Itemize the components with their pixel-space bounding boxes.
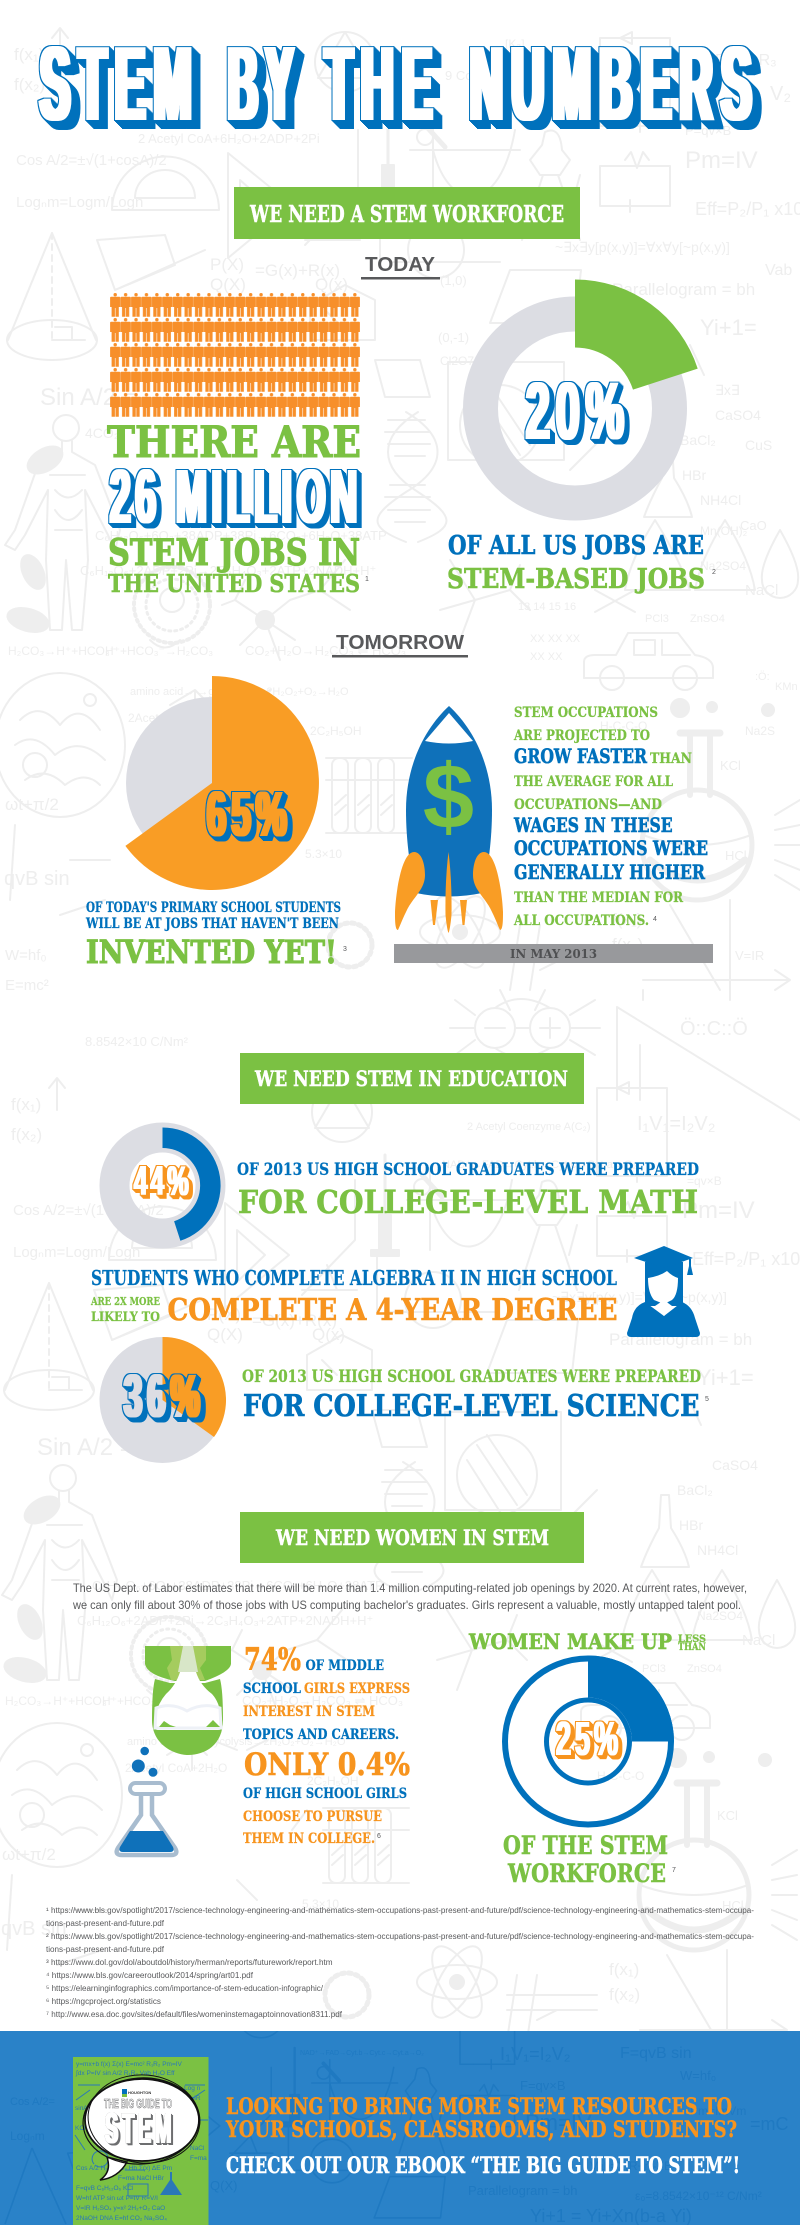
cover doodles: E=IR [186, 2095, 201, 2102]
caption bar: in May 2013 [394, 944, 713, 963]
background doodles: math and science sketches: Yi+1= [700, 315, 757, 340]
background doodles repeated lower on the page: CaSO4 [712, 1457, 758, 1473]
donut chart: 20 percent [480, 280, 698, 503]
background doodles: math and science sketches: CaO [740, 518, 767, 533]
background doodles: math and science sketches: [K₃] [505, 37, 525, 51]
text block: college-level math: FOR COLLEGE-LEVEL MATH [238, 1184, 698, 1221]
background doodles repeated lower on the page: f(x₂) [11, 1125, 42, 1144]
speech bubble with book title: THE BIG GUIDE TO [104, 2096, 172, 2111]
background doodles: math and science sketches: KCl [720, 758, 741, 773]
text block: of all US jobs are STEM-based: STEM-BASED JOBS [447, 563, 705, 595]
cover doodles: ∫dx P=IV sin A/2 R₁R₂ Vab H₂O Eff [75, 2070, 175, 2077]
text block: 74 percent and 0.4 percent of girls: INTEREST IN STEM [243, 1704, 375, 1720]
pie chart: 65 percent: 65% [207, 778, 292, 850]
background doodles repeated lower on the page: f(x₁) [11, 1095, 41, 1114]
heading: tomorrow: TOMORROW [336, 632, 464, 654]
background doodles: math and science sketches: 8.8542×10 C/Nm² [85, 1034, 189, 1049]
text block: STEM occupations grow faster: THAN [650, 751, 692, 767]
speech bubble with book title [80, 2070, 204, 2180]
icon: graduate in cap and gown [627, 1246, 700, 1337]
background doodles: math and science sketches: :Ö: [755, 671, 770, 683]
section banner: we need STEM in education: WE NEED STEM IN EDUCATION [254, 1066, 568, 1091]
footer doodles: Parallelogram = bh [468, 2183, 577, 2198]
text block: STEM occupations grow faster: THAN THE MEDIAN FOR [514, 890, 684, 906]
background doodles: math and science sketches: Mn(OH)₂ [700, 524, 748, 538]
background doodles repeated lower on the page: Yi+1= [697, 1365, 754, 1390]
background doodles: math and science sketches: XX XX XX [530, 633, 581, 645]
footer doodles: NAD⁺→FAD→Cyt.b→Cyt.c→Cyt.a→O₂ [300, 2050, 424, 2057]
background doodles: math and science sketches: Sin A/2 = [40, 384, 137, 411]
background doodles repeated lower on the page: Sin A/2 = [37, 1434, 134, 1461]
background doodles repeated lower on the page: NaCl [742, 1632, 775, 1649]
background doodles: math and science sketches: CuS [745, 437, 772, 453]
text block: STEM occupations grow faster: WAGES IN THESE [513, 814, 673, 837]
background doodles: math and science sketches: Cos A/2=±√(1+cosA)/2 [16, 152, 167, 169]
background doodles repeated lower on the page: 2Acetyl CoA+2H₂O [125, 1761, 227, 1775]
cover doodles [75, 2061, 208, 2222]
footer doodles: F=qv×B [520, 2078, 566, 2093]
footnotes: source URLs: ⁶ https://ngcproject.org/statistics [46, 1997, 161, 2006]
text block: STEM occupations grow faster: ALL OCCUPATIONS. [513, 913, 649, 929]
text block: college-level science: OF 2013 US HIGH SCHOOL GRADUATES WERE PREPARED [242, 1367, 701, 1386]
background doodles: math and science sketches: 9 Coenzyme A(C₂) [445, 68, 553, 83]
background doodles repeated lower on the page: 2C₂H₅OH [307, 1774, 358, 1788]
background doodles: math and science sketches: W=hf₀ [5, 947, 47, 964]
text block: algebra II and 4-year degree [90, 1266, 617, 1328]
background doodles repeated lower on the page: ~∃x∃y[p(x,y)]=∀x∀y[~p(x,y)] [552, 1289, 727, 1305]
background doodles: math and science sketches: qvB sin [4, 868, 70, 890]
heading: women make up less than: LESS [678, 1634, 706, 1645]
footer doodles: Logₙm [10, 2129, 45, 2143]
text block: STEM occupations grow faster: ARE PROJECTED TO [513, 728, 650, 744]
footer doodles: Pm=ImVm [690, 2104, 746, 2118]
title: BY [228, 25, 301, 143]
background doodles: math and science sketches: KMn [775, 681, 798, 693]
text block: algebra II and 4-year degree: LIKELY TO [91, 1310, 160, 1325]
cover doodles: V=IR H₂SO₄ y=x² 2H₂+O₂ CaO [76, 2205, 165, 2212]
footer panel: ebook call to action [0, 2031, 800, 2225]
background doodles repeated lower on the page: P(X) [207, 1305, 241, 1324]
footer doodles: Pm=IV [525, 2110, 592, 2135]
background doodles repeated lower on the page: 2 Acetyl Coenzyme A(C₂) [467, 1121, 590, 1133]
background doodles repeated lower on the page [0, 1069, 800, 2170]
background doodles: math and science sketches: P=qv×B [685, 123, 731, 138]
background doodles: math and science sketches: H⁺+HCO₃⁻→H₂CO₃ [105, 644, 213, 658]
background doodles repeated lower on the page: NAD⁺→FAD→Cyt.b→Cyt.c→Cyt.a→O₂ [442, 1159, 637, 1171]
ebook cover [73, 2057, 208, 2225]
text block: STEM occupations grow faster: GROW FASTER [514, 745, 648, 768]
cover doodles: NaCl [190, 2145, 205, 2152]
background doodles: math and science sketches: 13 14 15 16 [518, 601, 576, 613]
text block: 74 percent and 0.4 percent of girls: OF MIDDLE [306, 1658, 384, 1674]
text block: algebra II and 4-year degree: COMPLETE A 4-YEAR DEGREE [168, 1293, 618, 1328]
text block: STEM occupations grow faster: GENERALLY HIGHER [514, 861, 706, 884]
background doodles: math and science sketches: Logₙm=Logm/Logn [16, 194, 143, 211]
background doodles: math and science sketches: V₂ [770, 83, 791, 105]
caption bar: in May 2013: IN MAY 2013 [510, 947, 597, 961]
background doodles: math and science sketches: Q(x) [315, 275, 348, 294]
background doodles: math and science sketches: 2 Acetyl CoA+6H₂O+2ADP+2Pi [138, 131, 320, 146]
text block: 74 percent and 0.4 percent of girls [243, 1642, 410, 1847]
background doodles: math and science sketches: PCl3 [645, 613, 669, 625]
footer doodles: W=hf₀ [680, 2068, 716, 2083]
text block: STEM occupations grow faster: OCCUPATIONS WERE [514, 837, 708, 860]
paragraph: computing job openings: we can only fill about 30% of those jobs with US computing bachelor's graduates. Girls represent a valuable, mostly untapped talent pool. [72, 1598, 741, 1612]
pie chart: 36 percent [100, 1337, 226, 1463]
background doodles: math and science sketches: HBr [682, 467, 706, 483]
text block: of the STEM workforce: WORKFORCE [507, 1859, 666, 1888]
footnotes: source URLs: tions-past-present-and-future.pdf [46, 1919, 165, 1928]
speech bubble with book title: STEM [105, 2104, 175, 2153]
icon: rocket with dollar sign [395, 706, 503, 933]
text block: algebra II and 4-year degree: STUDENTS WHO COMPLETE ALGEBRA II IN HIGH SCHOOL [91, 1266, 617, 1290]
footer doodles: ε₀=8.8542×10⁻¹² C/Nm² [635, 2189, 762, 2203]
cover doodles: F=qvB C₆H₁₂O₆ KCl [76, 2185, 134, 2192]
footer doodles: Vab=Σ(R+r)-ΣE [590, 2159, 672, 2173]
background doodles: math and science sketches: (0,-1) [438, 330, 469, 345]
background doodles: math and science sketches: ZnSO4 [690, 613, 725, 625]
icon: rocket with dollar sign: $ [423, 746, 474, 848]
heading: women make up less than: WOMEN MAKE UP [468, 1629, 672, 1654]
footer doodles [4, 2031, 788, 2225]
background doodles: math and science sketches: E=mc² [5, 977, 49, 994]
footnotes: source URLs: ¹ https://www.bls.gov/spotlight/2017/science-technology-engineering-and-mathematics-stem-occupations-past-present-and-future/pdf/science-technology-engineering-and-mathematics-stem-occupa- [46, 1906, 754, 1915]
call to action text [225, 2094, 740, 2179]
background doodles: math and science sketches: Q(X) [210, 275, 246, 294]
background doodles: math and science sketches: V=IR [735, 948, 764, 963]
background doodles: math and science sketches: Na2SO4 [700, 559, 746, 573]
background doodles repeated lower on the page: HCl [722, 1898, 744, 1913]
cover doodles: y=mx+b f(x) Σ(x) E=mc² R₁R₂ Pm=IV [76, 2061, 183, 2068]
background doodles repeated lower on the page: NH4Cl [697, 1542, 738, 1558]
text block: STEM occupations grow faster: THE AVERAGE FOR ALL [514, 774, 673, 790]
text block: 74 percent and 0.4 percent of girls: CHOOSE TO PURSUE [243, 1809, 382, 1825]
background doodles: math and science sketches: Na2S [745, 724, 775, 738]
text block: there are 26 million STEM jobs: 1 [365, 576, 369, 583]
cover doodles: F=ma NaCl HBr [118, 2175, 165, 2182]
background doodles repeated lower on the page: =qv×B [687, 1174, 722, 1188]
cover doodles: KCl [75, 2125, 86, 2132]
cover doodles: W=hf ATP sin ωt P=IV R=V/I [76, 2195, 158, 2202]
background doodles repeated lower on the page: C₆H₁₂O₆+2ADP+2Pi→2C₃H₄O₃+2ATP+2NADH+H⁺ [77, 1613, 373, 1628]
ring chart: 25 percent: 25% [556, 1713, 622, 1766]
text block: 74 percent and 0.4 percent of girls: SCHOOL [243, 1681, 301, 1697]
footnotes: source URLs: ⁷ http://www.esa.doc.gov/sites/default/files/womeninstemagaptoinnovation8311.pdf [46, 2010, 343, 2019]
text block: of all US jobs are STEM-based: 2 [712, 569, 716, 576]
background doodles repeated lower on the page: H₂CO₃→H⁺+HCO₃⁻ [5, 1694, 113, 1708]
background doodles repeated lower on the page: =G(x)+R(x) [252, 1311, 337, 1330]
section banner: we need a STEM workforce [234, 187, 580, 239]
text block: 74 percent and 0.4 percent of girls: 6 [377, 1833, 381, 1840]
footer doodles: Q(X) [210, 2178, 237, 2193]
text block: college-level math [237, 1160, 699, 1221]
background doodles: math and science sketches: CO₂+H₂O→H₂CO₃ ⇌ HCO₃ [245, 643, 406, 658]
background doodles: math and science sketches: Σ(xᵢ-x̄) [235, 49, 277, 66]
text block: college-level science: 5 [705, 1396, 709, 1403]
text block: 74 percent and 0.4 percent of girls: THEM IN COLLEGE. [243, 1831, 375, 1847]
text block: jobs not invented yet: INVENTED YET! [86, 934, 337, 971]
section banner: we need women in STEM: WE NEED WOMEN IN STEM [275, 1525, 549, 1550]
background doodles: math and science sketches: H-C-C-O [600, 719, 647, 733]
background doodles repeated lower on the page: C₆H₁₂O₆+6O₂+38ADP+38Pi→6CO₂+6H₂O+38ATP [92, 1578, 384, 1593]
background doodles repeated lower on the page: PCl3 [642, 1663, 666, 1675]
text block: college-level math: OF 2013 US HIGH SCHOOL GRADUATES WERE PREPARED [237, 1160, 699, 1179]
text block: STEM occupations grow faster: OCCUPATIONS—AND [514, 797, 662, 813]
background doodles: math and science sketches [0, 28, 800, 1120]
background doodles: math and science sketches: Ö::C::Ö [680, 1018, 748, 1040]
footer doodles: I₁V₁=I₂V₂ [500, 2044, 571, 2064]
background doodles repeated lower on the page: Pm=IV [682, 1197, 755, 1224]
pie chart: 65 percent [125, 676, 319, 890]
background doodles: math and science sketches: CaSO4 [715, 407, 761, 423]
background doodles: math and science sketches: NaCl [745, 582, 778, 599]
background doodles: math and science sketches: amino acid→ →glycolysis→2H₂O₂+O₂→H₂O [130, 686, 349, 698]
text block: 74 percent and 0.4 percent of girls: GIRLS EXPRESS [304, 1681, 410, 1697]
background doodles repeated lower on the page: Q(X) [207, 1325, 243, 1344]
background doodles: math and science sketches: f(x₂) [14, 75, 45, 94]
background doodles repeated lower on the page: ZnSO4 [687, 1663, 722, 1675]
text block: of all US jobs are STEM-based [447, 531, 716, 595]
footnotes: source URLs: ² https://www.bls.gov/spotlight/2017/science-technology-engineering-and-mathematics-stem-occupations-past-present-and-future/pdf/science-technology-engineering-and-mathematics-stem-occupa- [46, 1932, 754, 1941]
text block: 74 percent and 0.4 percent of girls: TOPICS AND CAREERS. [243, 1727, 399, 1743]
background doodles: math and science sketches: f(x₁) [612, 910, 642, 929]
background doodles: math and science sketches: (1,0) [440, 273, 467, 288]
footnotes: source URLs: ⁴ https://www.bls.gov/careeroutlook/2014/spring/art01.pdf [46, 1971, 254, 1980]
background doodles: math and science sketches: f(x₂) [612, 935, 643, 954]
footer doodles: Cos A/2= [10, 2096, 55, 2108]
background doodles: math and science sketches: Cl2O7 [440, 354, 474, 368]
text block: jobs not invented yet [85, 900, 347, 971]
background doodles repeated lower on the page: CO₂+H₂O→H₂CO₃ ⇌ HCO₃ [242, 1693, 403, 1708]
background doodles: math and science sketches: Parallelogram = bh [612, 280, 755, 299]
cover doodles: sinA [75, 2105, 88, 2112]
text block: there are 26 million STEM jobs: THERE ARE [107, 418, 361, 468]
text block: 74 percent and 0.4 percent of girls: 74% [244, 1642, 301, 1678]
text block: STEM occupations grow faster: 4 [653, 916, 657, 923]
footnotes: source URLs: ³ https://www.dol.gov/dol/aboutdol/history/herman/reports/futurework/report.htm [46, 1958, 333, 1967]
cover doodles: Log n [184, 2085, 201, 2092]
heading: women make up less than: THAN [678, 1642, 706, 1653]
text block: of the STEM workforce: OF THE STEM [503, 1831, 668, 1860]
title [40, 25, 760, 143]
background doodles repeated lower on the page: H-C-C-O [597, 1769, 644, 1783]
text block: jobs not invented yet: OF TODAY'S PRIMARY SCHOOL STUDENTS [86, 900, 341, 916]
background doodles repeated lower on the page: f(x₂) [609, 1985, 640, 2004]
background doodles repeated lower on the page: f(x₁) [609, 1960, 639, 1979]
background doodles: math and science sketches: ~∃x∃y[p(x,y)]=∀x∀y[~p(x,y)] [555, 239, 730, 255]
background doodles repeated lower on the page: I₁V₁=I₂V₂ [637, 1113, 716, 1135]
footnotes: source URLs: ⁵ https://elearninginfographics.com/importance-of-stem-education-infographic/ [46, 1984, 324, 1993]
background doodles: math and science sketches: BaCl₂ [680, 432, 716, 448]
footer doodles: =mC [750, 2114, 789, 2134]
text block: of all US jobs are STEM-based: OF ALL US JOBS ARE [448, 531, 704, 561]
background doodles: math and science sketches: =G(x)+R(x) [255, 261, 340, 280]
text block: STEM occupations grow faster [513, 705, 708, 929]
background doodles: math and science sketches: R₁ R₂ R₃ [715, 52, 777, 69]
text block: there are 26 million STEM jobs: THE UNITED STATES [108, 569, 360, 598]
cover doodles: Cos A/2 H₂O CO₂ Hb Σ(x) ΔE Pm [76, 2165, 172, 2172]
background doodles: math and science sketches: ∃x∃ [715, 382, 740, 398]
background doodles repeated lower on the page: Na2SO4 [697, 1609, 743, 1623]
background doodles: math and science sketches: C₆H₁₂O₆+6O₂+38ADP+38Pi→6CO₂+6H₂O+38ATP [95, 528, 387, 543]
background doodles: math and science sketches: HCl [725, 848, 747, 863]
background doodles: math and science sketches: H₂CO₃→H⁺+HCO₃⁻ [8, 644, 116, 658]
background doodles: math and science sketches: f(x₁) [14, 45, 44, 64]
text block: of the STEM workforce [503, 1831, 676, 1888]
background doodles: math and science sketches: Vab [765, 262, 792, 279]
background doodles repeated lower on the page: Q(x) [312, 1325, 345, 1344]
background doodles: math and science sketches: C₆H₁₂O₆+2ADP+2Pi→2C₃H₄O₃+2ATP+2NADH+H⁺ [80, 563, 376, 578]
background doodles repeated lower on the page: Parallelogram = bh [609, 1330, 752, 1349]
background doodles repeated lower on the page: 5.3×10 [302, 1897, 339, 1911]
donut chart: 44 percent [114, 1128, 221, 1241]
heading: today: TODAY [365, 254, 436, 276]
background doodles repeated lower on the page: H⁺+HCO₃⁻→H₂CO₃ [102, 1694, 210, 1708]
paragraph: computing job openings [72, 1581, 747, 1612]
background doodles: math and science sketches: NH4Cl [700, 492, 741, 508]
text block: jobs not invented yet: 3 [343, 946, 347, 953]
background doodles repeated lower on the page: HBr [679, 1517, 703, 1533]
background doodles: math and science sketches: XX XX [530, 651, 563, 663]
background doodles repeated lower on the page: C NaZCO5 [367, 1069, 436, 1085]
background doodles repeated lower on the page: Logₙm=Logm/Logn [13, 1244, 140, 1261]
cover doodles: F=ma [190, 2155, 207, 2162]
text block: college-level science [242, 1367, 709, 1424]
text block: STEM occupations grow faster: STEM OCCUPATIONS [514, 705, 658, 721]
text: 26 MILLION [110, 454, 362, 540]
section banner: we need women in STEM [240, 1512, 584, 1563]
section banner: we need a STEM workforce: WE NEED A STEM WORKFORCE [249, 201, 564, 228]
pie chart: 36 percent: 36% [124, 1362, 205, 1430]
text block: jobs not invented yet: WILL BE AT JOBS THAT HAVEN'T BEEN [85, 916, 339, 932]
text block: 74 percent and 0.4 percent of girls: OF HIGH SCHOOL GIRLS [243, 1786, 407, 1802]
background doodles: math and science sketches: 2C₂H₅OH [310, 724, 362, 738]
background doodles repeated lower on the page: BaCl₂ [677, 1482, 713, 1498]
footer doodles: F=qvB sin [620, 2045, 692, 2062]
background doodles: math and science sketches: Pm=IV [685, 147, 758, 174]
icon: flask with bubbles [117, 1747, 176, 1855]
text block: there are 26 million STEM jobs [107, 418, 369, 598]
donut chart: 44 percent: 44% [134, 1157, 192, 1204]
footnotes: source URLs [46, 1906, 754, 2019]
background doodles: math and science sketches: ωt+π/2 [5, 795, 59, 814]
background doodles repeated lower on the page: amino acid→ →glycolysis→2H₂O₂+O₂→H₂O [127, 1736, 346, 1748]
paragraph: computing job openings: The US Dept. of Labor estimates that there will be more than 1.4 million computing-related job openings by 2020. At current rates, however, [73, 1581, 747, 1595]
text block: college-level science: FOR COLLEGE-LEVEL SCIENCE [243, 1389, 700, 1424]
background doodles repeated lower on the page: Cos A/2=±√(1+cosA)/2 [13, 1202, 164, 1219]
background doodles repeated lower on the page: qvB sin [1, 1918, 67, 1940]
background doodles repeated lower on the page: ωt+π/2 [2, 1845, 56, 1864]
background doodles: math and science sketches: P(X) [210, 255, 244, 274]
text block: 74 percent and 0.4 percent of girls: ONLY 0.4% [244, 1747, 410, 1783]
text block: there are 26 million STEM jobs: STEM JOBS IN [108, 532, 360, 574]
speech bubble with book title: HOUGHTON [128, 2090, 151, 2095]
icon: girl reading a book under a lamp [145, 1646, 231, 1755]
background doodles: math and science sketches: 4CO₂ [85, 425, 119, 441]
text block: of the STEM workforce: 7 [672, 1867, 676, 1874]
title: STEM [40, 25, 200, 143]
footnotes: source URLs: tions-past-present-and-future.pdf [46, 1945, 165, 1954]
text block: algebra II and 4-year degree: ARE 2X MORE [90, 1295, 160, 1308]
background doodles repeated lower on the page: KCl [717, 1808, 738, 1823]
cover doodles: 2NaOH DNA E=hf CO₂ Na₂SO₄ [76, 2215, 167, 2222]
background doodles: math and science sketches: 5.3×10 [305, 847, 342, 861]
title: THE [325, 25, 440, 143]
donut chart: 20 percent: 20% [526, 366, 630, 457]
ring chart: 25 percent [505, 1656, 674, 1824]
section banner: we need STEM in education [240, 1053, 584, 1104]
pictogram: grid of people [110, 293, 360, 418]
background doodles: math and science sketches: 2Acetyl CoA+2H₂O [128, 711, 230, 725]
